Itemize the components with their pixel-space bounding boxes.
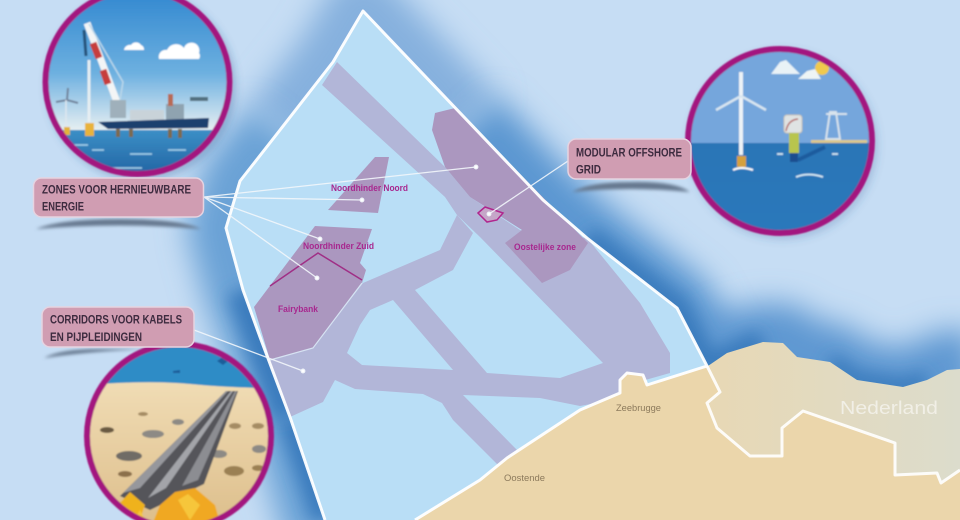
label: Zeebrugge: Zeebrugge (616, 403, 661, 413)
callout text: ZONES VOOR HERNIEUWBARE (42, 182, 191, 196)
land: Netherlands (700, 342, 960, 520)
line from corridors box (194, 330, 303, 371)
sun (815, 61, 829, 75)
white boundaries (226, 11, 960, 520)
line from modular grid box (489, 161, 568, 214)
corridors for cables and pipelines (265, 62, 670, 465)
submarine cable (798, 147, 825, 160)
zone: Noordhinder Noord (328, 157, 389, 213)
grid platform (789, 133, 799, 153)
circle: offshore construction vessel (40, 0, 240, 181)
label: Noordhinder Noord: Noordhinder Noord (331, 183, 408, 193)
callout: corridors voor kabels en pijpleidingen (42, 307, 194, 358)
circle: pipelines on the seabed (85, 340, 275, 520)
waves (777, 154, 838, 177)
land (415, 342, 960, 520)
zone: Oostelijke zone (432, 108, 588, 283)
grid platform sign (784, 115, 802, 133)
label: Oostende: Oostende (504, 473, 545, 483)
label: Noordhinder Zuid: Noordhinder Zuid (303, 241, 374, 251)
label: Oostelijke zone: Oostelijke zone (514, 242, 576, 252)
leader lines (194, 161, 568, 373)
deep water glow around zone (226, 11, 960, 520)
callout: zones voor hernieuwbare energie (34, 178, 204, 229)
ring shadow (688, 50, 878, 240)
vessel superstructure (130, 110, 164, 120)
callout: corridors voor kabels en pijpleidingen: EN PIJPLEIDINGEN (50, 330, 142, 344)
distant turbine (56, 88, 78, 103)
scene (690, 50, 870, 231)
crane (87, 23, 117, 102)
Fairybank lower edge (270, 283, 362, 360)
ring shadow (46, 0, 236, 181)
jack-up legs (118, 129, 180, 138)
national border (707, 366, 960, 483)
land strip (811, 140, 867, 143)
pipelines (120, 391, 238, 510)
foundations (64, 127, 70, 135)
waves (74, 145, 186, 168)
callout shadow (36, 219, 201, 229)
Belgian economic zone (226, 11, 707, 520)
coral (150, 488, 222, 520)
wind turbine (739, 72, 743, 155)
callout: zones voor hernieuwbare energie: ENERGIE (42, 200, 84, 214)
zone: Noordhinder Zuid and Fairybank (254, 226, 372, 360)
zone boundary and coast (226, 11, 707, 520)
clouds (771, 60, 800, 74)
zone water (226, 11, 707, 520)
lifted turbine tower (88, 60, 90, 122)
vessel hull (98, 118, 209, 129)
callout shadow (44, 349, 150, 358)
scene (85, 340, 275, 520)
ring (688, 49, 872, 233)
label: Fairybank: Fairybank (278, 304, 319, 314)
clouds (124, 42, 144, 50)
circle: modular offshore grid scene (685, 45, 878, 240)
label: Nederland: Nederland (840, 398, 938, 418)
turbine foundation (737, 156, 746, 167)
modular offshore grid site (478, 207, 503, 222)
scene (47, 0, 228, 172)
ring (87, 344, 271, 520)
callout: modular offshore grid: GRID (576, 162, 601, 176)
ring (46, 0, 230, 174)
land: Belgium (415, 366, 960, 520)
callout shadow (572, 182, 690, 192)
boundary between Noordhinder Zuid and Fairybank (270, 253, 362, 286)
callout text: MODULAR OFFSHORE (576, 146, 682, 160)
callout text: CORRIDORS VOOR KABELS (50, 312, 182, 326)
callout: modular offshore grid (568, 139, 691, 192)
fish (173, 357, 228, 373)
rocks (100, 412, 266, 477)
pylon (826, 112, 847, 139)
lines from renewable energy box (204, 167, 476, 278)
